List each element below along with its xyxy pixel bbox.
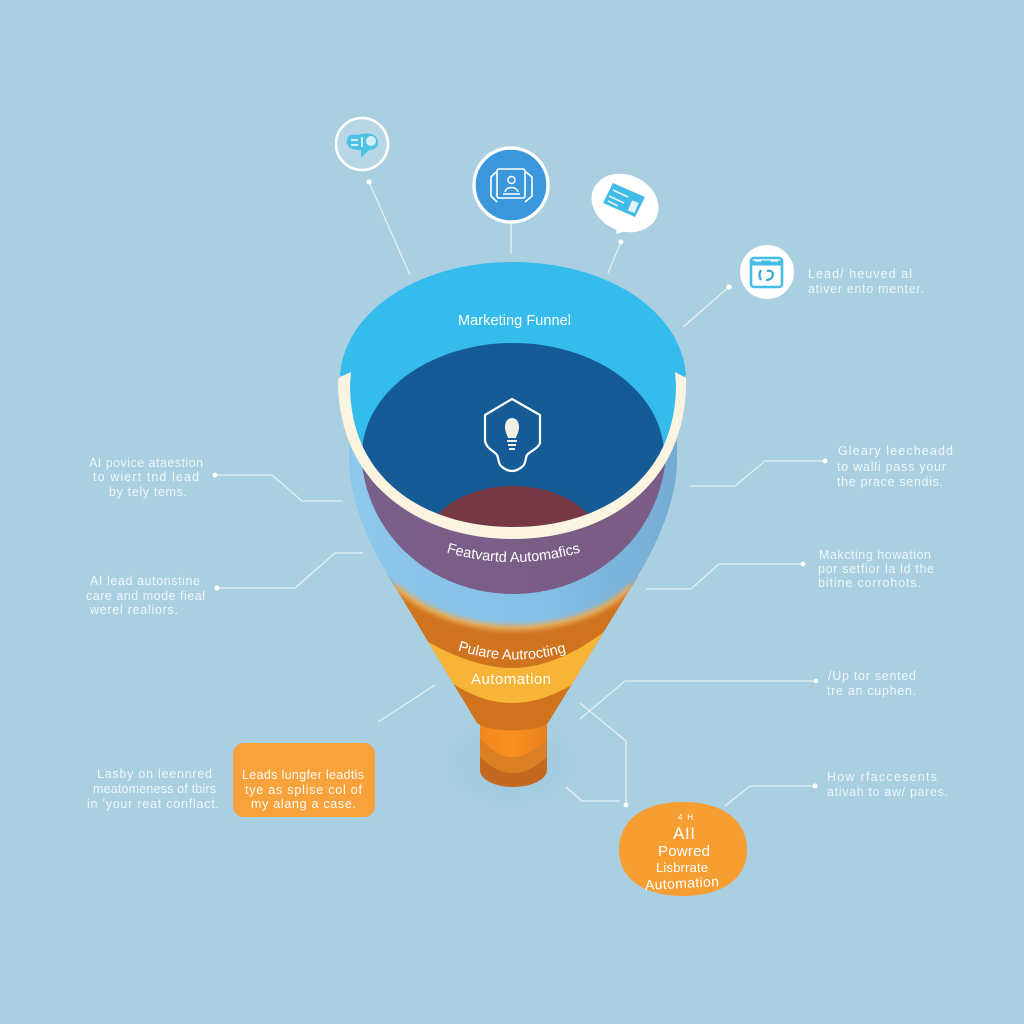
callout: AI powered automation bubble: Powred [658, 843, 710, 860]
band label: yellow: Automation [471, 671, 551, 688]
band label: dark orange: Pulare Autrocting [458, 641, 566, 660]
text block: right middle: bitine corrohots. [818, 576, 921, 590]
text block: right upper: Gleary leecheadd [838, 444, 953, 458]
icon: blue profile badge [474, 148, 548, 222]
text block: right upper: to walli pass your [837, 460, 946, 474]
funnel orange lower body [385, 570, 638, 730]
cyan funnel mouth [340, 262, 686, 527]
heading: marketing funnel: Marketing Funnel [458, 313, 571, 329]
text block: left middle: care and mode fieal [86, 589, 205, 603]
blended blue-orange edge [395, 586, 632, 628]
text block: left lower: in 'your reat conflact. [87, 797, 219, 811]
purple band [362, 440, 665, 594]
callout: AI powered automation bubble [619, 802, 747, 896]
text block: right lower one: tre an cuphen. [827, 684, 916, 698]
text block: right lower two: ativah to aw/ pares. [827, 785, 948, 799]
callout: AI powered automation bubble: 4H [678, 813, 693, 822]
connector lines [212, 180, 828, 808]
text block: left upper: to wiert tnd lead [93, 470, 199, 484]
text block: top right: ativer ento menter. [808, 282, 924, 296]
callout: AI powered automation bubble: AII [673, 824, 695, 843]
text block: left lower: meatomeness of tbirs [93, 782, 216, 796]
light blue outer band [349, 430, 677, 628]
callout: orange box: Leads lungfer leadtis [242, 768, 364, 782]
text block: left upper: AI povice ataestion [89, 456, 203, 470]
text block: right upper: the prace sendis. [837, 475, 943, 489]
text block: right lower one: /Up tor sented [828, 669, 916, 683]
text block: left upper: by tely tems. [109, 485, 187, 499]
text block: right middle: por setfior la ld the [818, 562, 934, 576]
callout: AI powered automation bubble: Automation [645, 873, 719, 893]
red funnel base [438, 486, 588, 527]
icon: document speech bubble [582, 163, 668, 243]
spout [480, 712, 547, 787]
band label: purple: Featvartd Automafics [447, 543, 580, 562]
text block: left middle: AI lead autonstine [90, 574, 200, 588]
callout: orange box [233, 743, 375, 817]
callout: orange box: my alang a case. [251, 797, 356, 811]
spout shadow [438, 712, 582, 812]
text block: right middle: Makcting howation [819, 548, 931, 562]
text block: top right: Lead/ heuved al [808, 267, 912, 281]
icon: chat bubble [336, 118, 388, 170]
text block: left middle: werel realiors. [89, 603, 178, 617]
text block: right lower two: How rfaccesents [827, 770, 937, 784]
navy inner cone [362, 343, 664, 527]
icon: browser window [740, 245, 794, 299]
icon: shield with light bulb [485, 399, 540, 471]
callout: AI powered automation bubble: Lisbrrate [656, 860, 708, 875]
text block: left lower: Lasby on leennred [97, 767, 212, 781]
funnel [338, 262, 686, 812]
cream rim [338, 372, 686, 539]
callout: orange box: tye as splise col of [245, 783, 363, 797]
